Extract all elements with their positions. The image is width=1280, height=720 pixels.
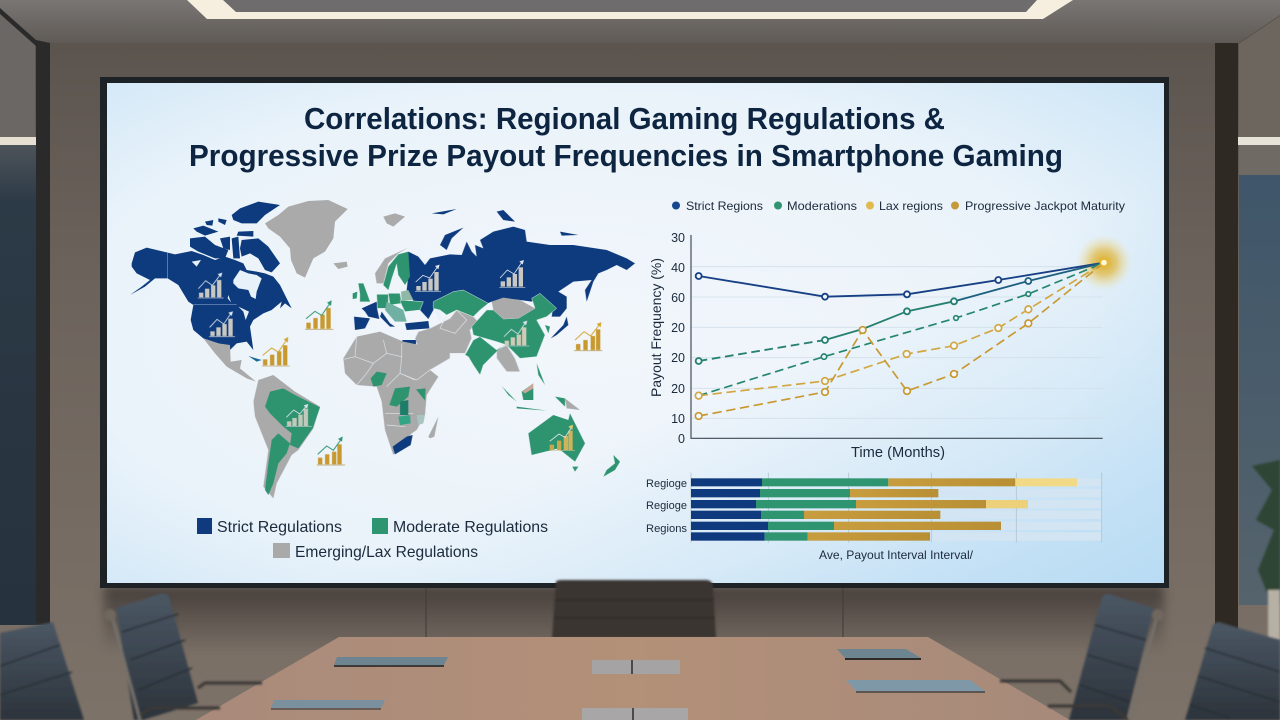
icon: gold growth chart, south atlantic [317,436,345,465]
y axis labels: 20 [671,321,685,335]
greenland and iceland [265,200,348,278]
bar row 5 [691,522,1001,530]
title [189,101,1063,173]
y axis title: Payout Frequency (%) [648,258,664,397]
line chart [648,231,1132,461]
legend: emerging/lax regulations: Emerging/Lax Regulations [295,544,478,561]
highlight glow [1076,235,1132,291]
wall panel seams [426,588,843,638]
bar row 4 [691,511,940,519]
plant [1252,460,1280,640]
title: Correlations: Regional Gaming Regulations & [304,101,945,136]
icon: chart on west russia [415,265,441,291]
bar row labels: Regioge [646,478,687,490]
caribbean [248,356,262,362]
map legend [197,518,548,561]
africa, south america, oceania [253,332,620,498]
north america and greenland [130,200,348,351]
center table inset 2 [582,708,688,720]
right window [1215,16,1280,640]
table [196,637,1070,720]
bar row 3 [691,500,1028,508]
icon: gold growth chart, atlantic [305,300,333,329]
mongolia [492,298,535,319]
icon: chart on canada [198,273,224,298]
icon: chart on australia [549,425,575,451]
legend: lax regions: Lax regions [879,199,943,213]
legend: strict regulations: Strict Regulations [217,519,342,536]
map land shapes [130,200,635,498]
y axis labels: 30 [671,231,685,245]
icon: gold growth chart, pacific [574,322,602,351]
tablet left 1 [334,657,448,667]
african borders [344,337,430,427]
screen frame [100,77,1169,588]
icon: chart on usa [209,311,235,337]
chair right [1000,594,1164,720]
legend: strict regions: Strict Regions [686,199,763,213]
y axis labels: 20 [671,382,685,396]
y axis labels: 0 [678,432,685,446]
inland water [192,260,249,320]
belarus [401,290,413,300]
chair front left [0,622,84,720]
caspian sea [435,310,443,323]
legend: moderations: Moderations [787,199,857,213]
bar chart axis title: Ave, Payout Interval Interval/ [819,548,974,562]
national borders [168,252,237,304]
central america [203,338,256,382]
bar row labels: Regions [646,523,688,535]
y axis labels [671,231,685,446]
y axis labels: 40 [671,261,685,275]
series: progressive jackpot maturity [695,263,1104,419]
icon: chart on brazil [286,404,312,427]
bar tracks [691,478,1102,541]
bar row labels: Regioge [646,500,687,512]
stacked bar chart [646,473,1102,562]
wall below screen [104,586,1164,652]
line chart legend [672,199,1125,213]
series: moderations dashed [699,263,1104,396]
left window [0,8,50,625]
ceiling with light panel [0,0,1280,43]
y axis labels: 10 [671,412,685,426]
legend: progressive jackpot maturity: Progressive Jackpot Maturity [965,199,1125,213]
icon: gold growth chart, caribbean [262,337,290,366]
axes [691,235,1103,438]
series: strict regions [696,263,1104,300]
title: Progressive Prize Payout Frequencies in Smartphone Gaming [189,138,1063,173]
balkans [385,302,407,322]
bar row 2 [691,489,938,497]
world map [130,200,635,498]
tablet right 2 [846,680,985,693]
chair front right [1185,622,1280,720]
series: lax regions [695,263,1104,399]
center table inset 1 [592,660,680,674]
y axis labels: 60 [671,291,685,305]
chair left [104,594,262,720]
y axis labels: 20 [671,351,685,365]
hudson bay [233,270,262,299]
center chair [552,580,716,638]
series: moderations solid [696,263,1104,364]
eurasia [353,209,635,375]
legend: moderate regulations: Moderate Regulations [393,519,548,536]
bar gridlines [691,473,1102,543]
tablet left 2 [271,700,385,710]
tablet right 1 [837,649,921,660]
bar row 1 [691,478,1077,486]
icon: chart on east russia [499,260,525,287]
bar row labels [646,478,688,535]
x axis title: Time (Months) [851,445,945,461]
map chart icons [198,260,602,465]
grid [691,267,1103,418]
bar row 6 [691,532,930,541]
highlighted endpoint [1100,259,1108,266]
icon: chart on china [503,321,529,346]
screen surface [107,83,1164,583]
